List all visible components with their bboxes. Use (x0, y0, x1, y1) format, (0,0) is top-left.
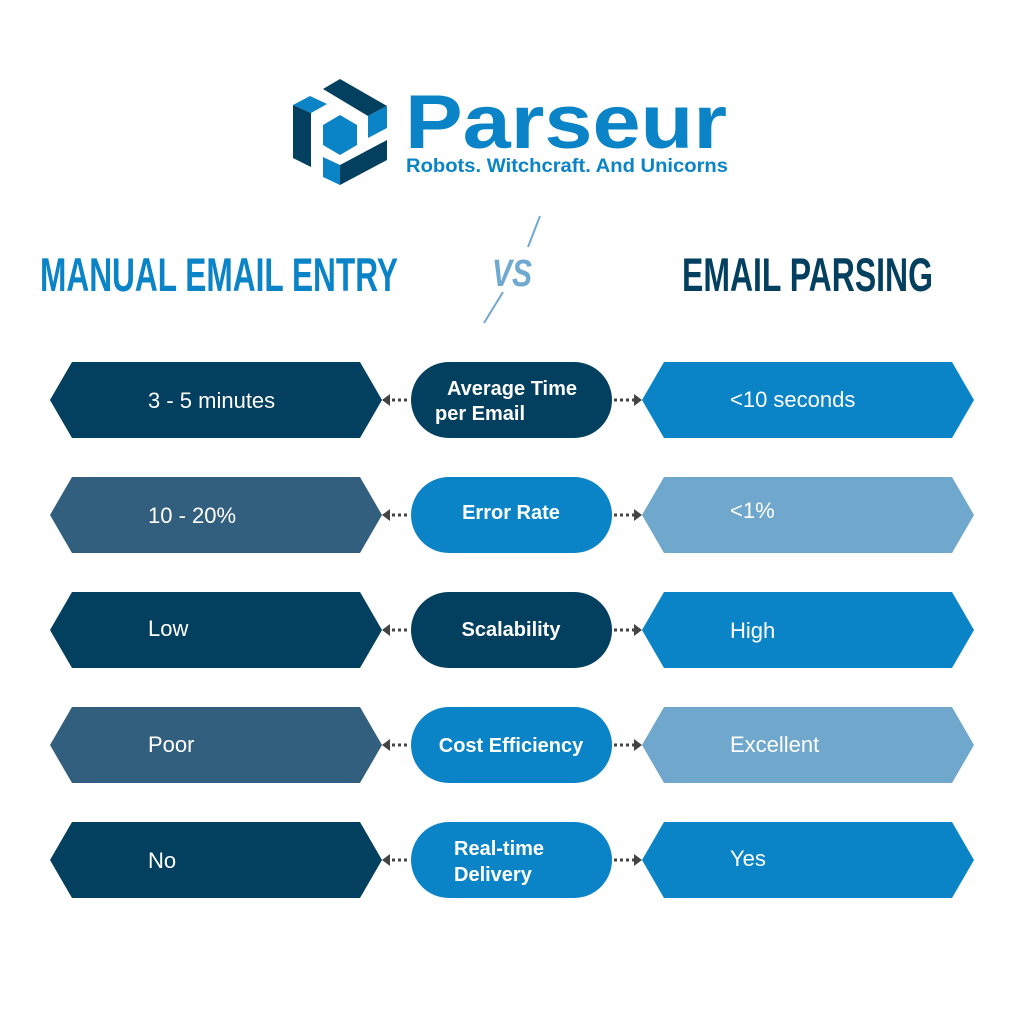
row: real-time delivery: Delivery (454, 864, 533, 886)
row: average time: <10 seconds (730, 387, 855, 412)
row: cost efficiency: Poor (148, 732, 194, 757)
vs divider: VS (492, 253, 532, 295)
row: error rate: <1% (730, 498, 775, 523)
row: error rate (50, 477, 974, 553)
row: scalability (50, 592, 974, 668)
tagline: Robots. Witchcraft. And Unicorns (406, 156, 728, 177)
row: scalability: Low (148, 616, 188, 641)
row: real-time delivery: No (148, 848, 176, 873)
row: cost efficiency: Excellent (730, 732, 819, 757)
row: real-time delivery (50, 822, 974, 898)
logo (293, 79, 728, 185)
row: cost efficiency: Cost Efficiency (439, 735, 584, 757)
row: scalability: High (730, 618, 775, 643)
row: real-time delivery: Yes (730, 846, 766, 871)
icon: parseur cube (293, 79, 387, 185)
row: average time: Average Time (447, 378, 577, 400)
row: scalability: Scalability (462, 619, 561, 641)
row: error rate: Error Rate (462, 502, 560, 524)
row: average time: 3 - 5 minutes (148, 388, 275, 413)
row: average time: per Email (435, 403, 525, 425)
row: error rate: 10 - 20% (148, 503, 236, 528)
vs divider (484, 216, 540, 323)
row: cost efficiency (50, 707, 974, 783)
row: real-time delivery: Real-time (454, 838, 544, 860)
logo wordmark: Parseur (405, 80, 727, 165)
heading: manual email entry: MANUAL EMAIL ENTRY (40, 248, 398, 301)
row: average time (50, 362, 974, 438)
